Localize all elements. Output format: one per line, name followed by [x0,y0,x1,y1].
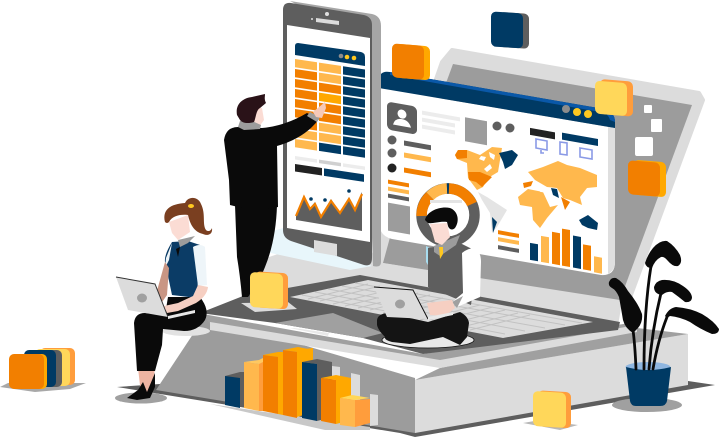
yellow cube bottom right [523,390,578,430]
device icons [536,139,592,159]
trackpad strip [290,328,329,336]
dashboard window [379,72,615,275]
phone label bars [295,156,365,182]
keyboard keys [302,283,582,334]
cube stack bottom left [0,348,86,392]
pale reflection under phone [266,228,372,270]
window control dots [562,105,592,118]
trackpad [275,313,383,338]
phone table [295,59,365,182]
bar chart [530,223,602,274]
phone [283,1,381,266]
cube: orange on window [392,43,430,80]
seated man with laptop [374,208,481,348]
laptop deck under phone [250,250,382,298]
3D bar chart on platform [210,347,378,430]
yellow cube on deck [241,271,297,312]
status dots [388,122,514,172]
cube: yellow on window [595,79,633,117]
profile and list widgets [387,101,598,268]
donut chart [422,188,474,242]
laptop lid [362,50,703,326]
seated woman with laptop [115,198,212,404]
standing man [224,94,326,297]
cube: orange on lid [628,159,666,197]
laptop platform base [117,314,715,437]
phone area chart [296,189,362,231]
phone header [295,43,365,66]
floating squares on lid [635,105,662,156]
world map [455,147,598,233]
keyboard deck [200,275,620,354]
cube: navy top [491,11,529,49]
potted plant [609,241,719,412]
